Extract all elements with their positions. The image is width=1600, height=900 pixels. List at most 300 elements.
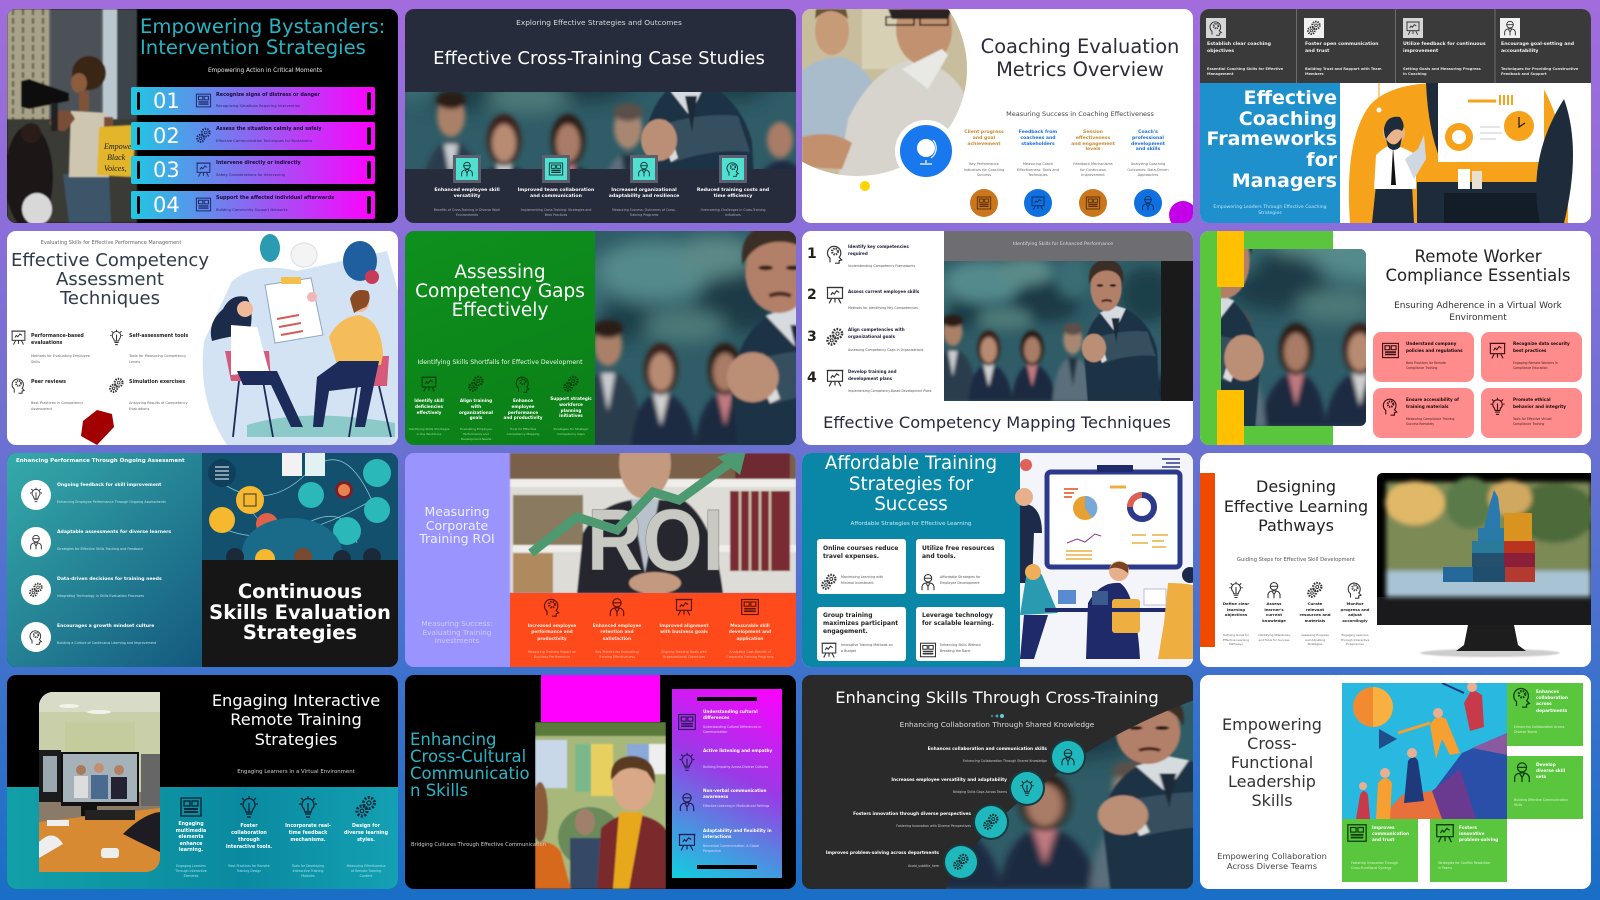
item 3 note: Best Practices in Competency xyxy=(31,401,83,405)
heading xyxy=(212,691,380,749)
roi 4 note: Corporate Training Programs xyxy=(726,655,774,659)
item 1 title: Enhances collaboration and communication skills xyxy=(928,747,1047,752)
slide: Skills Through Cross-Training xyxy=(802,675,1193,889)
roi 3 title: with business goals xyxy=(660,630,708,635)
step 4 title xyxy=(1341,601,1369,623)
box: diverse skills xyxy=(1507,756,1583,819)
item 3 badge xyxy=(975,806,1007,838)
item 4 title: Adaptability and flexibility in xyxy=(703,828,772,833)
card: free resources xyxy=(916,539,1005,594)
step 3 title xyxy=(848,326,905,340)
subtitle: Strategies xyxy=(1258,211,1282,216)
item 3 title: adaptability and resilience xyxy=(609,194,679,199)
column 2 note xyxy=(1305,67,1382,76)
photo: protester with megaphone: Empower xyxy=(103,142,136,151)
title: communication xyxy=(1372,832,1409,837)
method 2 title: through xyxy=(238,838,260,843)
item 1 note: Skills xyxy=(31,360,40,364)
step 3 title: materials xyxy=(1305,618,1325,623)
gap 3 note xyxy=(507,427,539,437)
heading: Coaching Evaluation xyxy=(981,35,1179,58)
step 2 title: Assess xyxy=(1267,601,1281,606)
title xyxy=(1406,397,1459,410)
title: Develop xyxy=(1536,763,1556,768)
heading: Coaching xyxy=(1239,108,1337,130)
metric 4 title: professional xyxy=(1132,136,1164,141)
step 4 note: Experiences xyxy=(1346,642,1364,646)
step 1 title: learning xyxy=(1227,607,1245,612)
icon xyxy=(1511,761,1533,783)
step 4 note: Through Interactive xyxy=(1341,638,1369,642)
yellow accent bottom xyxy=(1217,390,1244,445)
method 4 note: Measuring Effectiveness xyxy=(347,864,385,868)
method 2 title: Foster xyxy=(240,824,258,829)
heading: Strategies for xyxy=(849,474,973,494)
icon xyxy=(820,641,838,659)
item 4 note: Initiatives xyxy=(725,213,741,217)
text: maximizes participant xyxy=(823,620,898,627)
note: Compliance Training xyxy=(1513,422,1544,426)
title: Ensure accessibility of xyxy=(1406,397,1459,402)
item 4 badge xyxy=(945,846,977,878)
gap 4 title: planning xyxy=(561,408,581,413)
gap 4 note: Strategies for Strategic xyxy=(554,427,588,431)
subtitle: Identifying Skills Shortfalls for Effective Development xyxy=(417,359,583,366)
column 2 title: and trust xyxy=(1305,48,1329,54)
method 4 title xyxy=(344,823,388,844)
note xyxy=(940,575,980,587)
step 3 title: organizational goals xyxy=(848,334,895,339)
subtitle xyxy=(1394,301,1562,324)
step 1 title: Identify key competencies xyxy=(848,244,909,249)
gap 3 title: employee xyxy=(512,404,534,409)
heading: for xyxy=(1306,149,1337,171)
item 2 icon xyxy=(21,527,51,557)
roi 1 title: Increased employee xyxy=(528,624,576,629)
item 1 text: Performance-based xyxy=(31,334,84,339)
metric 3 note: Feedback Mechanisms xyxy=(1073,162,1113,166)
item 4 title: time efficiency xyxy=(714,194,752,199)
icon tile 1 xyxy=(453,155,481,183)
column 2 title: Foster open communication xyxy=(1305,42,1379,47)
pill right xyxy=(367,161,371,179)
yellow accent top xyxy=(1217,231,1244,287)
item 3 title: Increased organizational xyxy=(611,188,677,193)
heading: Remote Worker xyxy=(1414,247,1542,266)
heading xyxy=(415,263,585,320)
slide: Cross-Training Case Studies xyxy=(405,9,796,223)
top bar xyxy=(697,697,757,701)
text: engagement. xyxy=(823,628,868,635)
main heading: Strategies xyxy=(243,621,357,644)
step 2 title: learner's xyxy=(1264,607,1284,612)
item 2 text: Self-assessment tools xyxy=(129,334,188,339)
photo: protester with megaphone: Voices, xyxy=(104,164,126,173)
heading: Assessing xyxy=(454,262,546,283)
heading: Compliance Essentials xyxy=(1386,266,1570,285)
roi 4 title xyxy=(729,624,771,643)
metric 1 note: Key Performance xyxy=(969,162,999,166)
item 3 title: Data-driven decisions for training needs xyxy=(57,577,162,582)
column 3 note: in Coaching xyxy=(1403,72,1427,76)
method 4 title: Design for xyxy=(352,824,380,829)
metric 4 title xyxy=(1131,130,1165,152)
heading: Intervention Strategies xyxy=(140,36,366,58)
note: Breaking the Bank xyxy=(940,649,970,653)
column 4 note: Techniques for Providing Constructive xyxy=(1501,67,1578,71)
step 2 icon xyxy=(825,285,845,305)
heading: Skills xyxy=(1251,791,1293,810)
item 2 title: Adaptable assessments for diverse learners xyxy=(57,530,171,535)
subtitle: Ensuring Adherence in a Virtual Work xyxy=(1394,301,1562,311)
roi 2 note: Key Metrics for Evaluating xyxy=(595,650,639,654)
heading xyxy=(1206,87,1337,192)
item 2 note: Implementing Cross-Training: Strategies and xyxy=(521,208,591,212)
heading: Corporate xyxy=(426,518,488,532)
title: Recognize data security xyxy=(1513,341,1570,346)
metric 1 title xyxy=(964,130,1004,147)
note: Minimal Investment xyxy=(841,581,874,585)
heading: Effective Competency xyxy=(11,250,209,271)
step 4 title: development plans xyxy=(848,376,892,381)
gap 2 title: Align training xyxy=(460,398,492,403)
slide: Coaching Evaluation Metrics xyxy=(802,9,1193,223)
card: ethics xyxy=(1481,388,1582,438)
item 2 title: Active listening and empathy xyxy=(703,748,772,753)
divider lines xyxy=(1296,9,1496,83)
column 4 title xyxy=(1501,42,1574,54)
method 1 note xyxy=(175,864,207,880)
header band xyxy=(944,231,1193,261)
method 2 title xyxy=(226,823,272,851)
heading: Pathways xyxy=(1258,516,1334,535)
method 4 note: Content xyxy=(360,874,372,878)
method 4 title: diverse learning xyxy=(344,831,388,836)
gap 3 title xyxy=(504,398,542,421)
slide: Empowering Bystanders xyxy=(7,9,398,223)
step title: Assess the situation calmly and safely xyxy=(216,126,322,132)
side panel xyxy=(672,689,782,878)
item 4 icon xyxy=(21,622,51,652)
step 3 title: resources and xyxy=(1299,612,1331,617)
roi 3 note xyxy=(661,650,707,660)
step note: Effective Communication Techniques for Bystanders xyxy=(216,139,312,143)
step 1 note: Effective Learning xyxy=(1223,638,1249,642)
subtitle: Measuring Success: xyxy=(421,619,493,628)
roi 1 icon xyxy=(542,597,562,617)
gap 4 icon xyxy=(562,375,580,393)
metric 2 note: Effectiveness: Tools and xyxy=(1017,168,1059,172)
gap 2 title: organizational xyxy=(459,410,493,415)
column 4 title: accountability xyxy=(1501,48,1538,54)
item 3 note xyxy=(612,208,676,217)
roi 2 title xyxy=(593,624,641,643)
roi 3 title xyxy=(660,624,708,637)
step 2 title: knowledge xyxy=(1262,618,1286,623)
note: Employee Development xyxy=(940,581,980,585)
roi 1 note: Business Performance xyxy=(534,655,570,659)
step 1 title: Define clear xyxy=(1223,601,1249,606)
text: Utilize free resources xyxy=(922,545,995,552)
item 4 title: Encourages a growth mindset culture xyxy=(57,624,154,629)
note: Engaging Remote Workers in xyxy=(1513,361,1558,365)
note xyxy=(1514,725,1564,736)
metric 4 note: Outcomes: Data-Driven xyxy=(1127,168,1169,172)
icon xyxy=(919,573,937,591)
title xyxy=(1372,826,1409,845)
subtitle: Empowering Leaders Through Effective Coaching xyxy=(1213,205,1327,210)
heading: Metrics Overview xyxy=(996,58,1164,81)
roi 1 note: Measuring Training Impact on xyxy=(528,650,576,654)
step 4 title: accordingly xyxy=(1342,618,1368,623)
gap 1 note: Identifying Skills Shortages xyxy=(409,427,449,431)
heading: Techniques xyxy=(60,288,160,309)
note xyxy=(1406,361,1446,372)
slide: Corporate Training ROI xyxy=(405,453,796,667)
slide: Affordable Training Strategies xyxy=(802,453,1193,667)
metric 1 note: Indicators for Coaching xyxy=(964,168,1004,172)
method 1 note: Through Interactive xyxy=(175,869,207,873)
item 1 note: Enhancing Employee Performance Through Ongoing Assessments xyxy=(57,500,166,504)
note: in Teams xyxy=(1438,866,1452,870)
method 2 title: interactive tools. xyxy=(226,845,272,850)
heading: Enhancing Skills Through Cross-Training xyxy=(835,688,1159,707)
step 2 note: Identifying Milestones xyxy=(1258,633,1290,637)
heading: Cross-Cultural xyxy=(410,747,526,766)
pill left xyxy=(137,127,140,145)
item 4 icon xyxy=(108,377,125,394)
heading: n Skills xyxy=(410,781,468,800)
text: Online courses reduce xyxy=(823,545,898,552)
method 4 icon xyxy=(354,795,378,819)
step title: Intervene directly or indirectly xyxy=(216,160,301,166)
method 1 title: Engaging xyxy=(178,822,204,827)
gap 3 note: Competency Mapping xyxy=(507,432,539,436)
roi 2 title: satisfaction xyxy=(603,637,631,642)
subtitle: Enhancing Collaboration Through Shared Knowledge xyxy=(900,720,1094,729)
item 1 title: Ongoing feedback for skill improvement xyxy=(57,483,161,488)
item 1 icon xyxy=(21,480,51,510)
heading: Leadership xyxy=(1228,772,1316,791)
heading xyxy=(140,15,385,58)
title: problem-solving xyxy=(1459,838,1498,843)
item 3 icon xyxy=(21,575,51,605)
column 3 note xyxy=(1403,67,1481,76)
icon xyxy=(196,128,211,143)
title: across xyxy=(1536,702,1552,707)
metric 2 title: Feedback from xyxy=(1019,130,1057,135)
icon xyxy=(1381,397,1400,416)
slide: Cross-Functional Leadership xyxy=(1200,675,1591,889)
box: communication xyxy=(1342,819,1418,882)
step note: Recognizing Situations Requiring Intervention xyxy=(216,104,300,108)
heading: Measuring xyxy=(424,504,490,519)
metric 2 note: Measuring Coach xyxy=(1023,162,1053,166)
heading: Remote Training xyxy=(230,710,362,729)
method 1 icon xyxy=(179,795,203,819)
heading: Empowering Bystanders: xyxy=(140,15,385,38)
step 4 note xyxy=(1341,633,1369,647)
heading: Strategies xyxy=(255,730,337,749)
heading: Engaging Interactive xyxy=(212,691,380,710)
title: sets xyxy=(1536,775,1546,780)
slide: Continuous Skills Evaluation xyxy=(7,453,398,667)
pill left xyxy=(137,196,140,214)
item 1 title xyxy=(703,709,758,721)
metric 3 title: Session xyxy=(1083,130,1103,135)
item 1 note xyxy=(31,354,90,365)
icon tile 1 xyxy=(1206,18,1226,38)
item 4 note: Evaluations xyxy=(129,406,149,410)
method 1 title xyxy=(176,822,206,854)
step 2 number: 2 xyxy=(807,287,817,303)
step 2 icon xyxy=(1265,581,1283,599)
icon tile 4 xyxy=(1500,18,1520,38)
step 1 title: required xyxy=(848,251,868,256)
slide: Competency Assessment Techniques xyxy=(7,231,398,445)
item 3 note: Fostering Innovation with Diverse Perspectives xyxy=(896,824,971,828)
method 4 note: of Remote Training xyxy=(351,869,381,873)
gap 4 title xyxy=(550,396,592,419)
method 1 title: multimedia xyxy=(176,828,206,834)
roi 4 title: application xyxy=(736,637,763,642)
metric 3 icon xyxy=(1079,189,1107,217)
note: Enhancing Collaboration Across xyxy=(1514,725,1564,729)
note: Innovative Training Methods on xyxy=(841,643,893,647)
step 4 title: progress and xyxy=(1341,607,1369,612)
note: Skills xyxy=(1514,803,1522,807)
subtitle: Engaging Learners in a Virtual Environment xyxy=(237,769,355,775)
roi 3 icon xyxy=(674,597,694,617)
item 1 text xyxy=(31,333,84,346)
item 3 icon xyxy=(677,792,697,812)
text xyxy=(922,612,994,628)
illustration: team climbing a mountain xyxy=(1342,683,1507,819)
metric 2 title xyxy=(1019,130,1057,147)
note xyxy=(1406,417,1454,428)
item 1 title: Understanding cultural xyxy=(703,709,758,714)
gap 1 title: effectively xyxy=(417,410,441,415)
photo: man pointing behind curved dark panel xyxy=(802,675,1193,889)
item 1 title: differences xyxy=(703,715,729,720)
heading: Effectively xyxy=(452,300,548,321)
column 3 note: Setting Goals and Measuring Progress xyxy=(1403,67,1481,71)
step 1 note xyxy=(1223,633,1249,647)
heading xyxy=(410,731,530,799)
photo: protester with megaphone xyxy=(7,9,138,223)
roi 2 icon xyxy=(607,597,627,617)
method 3 note: Interactive Training xyxy=(293,869,323,873)
heading: Effective Learning xyxy=(1224,496,1368,516)
icon xyxy=(1434,822,1456,844)
item 4 note xyxy=(700,208,766,217)
metric 4 title: development xyxy=(1131,142,1165,147)
teal panel xyxy=(802,453,1020,667)
method 2 note: Best Practices for Remote xyxy=(228,864,270,868)
item 4 note: Analyzing Results of Competency xyxy=(129,401,188,405)
item 2 note: Tools for Measuring Competency xyxy=(129,354,186,358)
gap 2 icon xyxy=(467,375,485,393)
gap 1 title: Identify skill xyxy=(414,398,444,403)
note xyxy=(1351,861,1398,872)
icon xyxy=(196,162,211,177)
photo: man pointing, mirrored xyxy=(1221,249,1366,426)
photo: young man in festival clothing xyxy=(535,722,666,889)
step 01 bar xyxy=(131,87,375,115)
item 2 note: Strategies for Effective Skills Tracking and Feedback xyxy=(57,547,143,551)
dark margin beside photo xyxy=(1161,261,1193,401)
item 3 icon xyxy=(10,377,27,394)
note: Compliance Education xyxy=(1513,366,1548,370)
item 2 note xyxy=(129,354,186,365)
item 4 note: Overcoming Challenges in Cross-Training xyxy=(700,208,766,212)
metric 4 note: Approaches xyxy=(1138,173,1158,177)
title xyxy=(1406,341,1463,354)
item 4 note: Perspective xyxy=(703,849,721,853)
step 4 title xyxy=(848,368,897,382)
slide: Assessing Competency Gaps xyxy=(405,231,796,445)
metric 2 note: Techniques xyxy=(1028,173,1048,177)
heading: Enhancing xyxy=(410,730,496,749)
item 4 note xyxy=(703,844,759,854)
metric 3 note: for Continuous xyxy=(1080,168,1106,172)
number: 03 xyxy=(153,158,180,182)
heading: Cross- xyxy=(1247,734,1297,753)
item 4 title: interactions xyxy=(703,834,731,839)
icon xyxy=(1488,397,1507,416)
box: collaboration xyxy=(1507,683,1583,746)
step 1 icon xyxy=(825,244,845,264)
gap 3 note: Tools for Effective xyxy=(510,427,536,431)
icon tile 4 xyxy=(719,155,747,183)
column 1 note xyxy=(1207,67,1283,76)
icon xyxy=(196,94,212,108)
metric 3 title: effectiveness xyxy=(1076,136,1110,141)
gap 4 note: Competency Gaps xyxy=(557,432,585,436)
subtitle: Guiding Steps for Effective Skill Development xyxy=(1237,557,1355,563)
heading xyxy=(419,505,495,546)
icon: globe xyxy=(917,139,937,165)
metric 1 title: achievement xyxy=(967,142,1001,147)
heading: Competency Gaps xyxy=(415,281,585,302)
photo: man pointing in front of colleagues xyxy=(595,231,796,445)
item 1 title: Enhanced employee skill xyxy=(434,188,500,193)
metric 3 note: Improvement xyxy=(1081,173,1105,177)
subtitle: Empowering Action in Critical Moments xyxy=(208,68,322,74)
title: Understand company xyxy=(1406,341,1456,346)
item 3 title: Fosters innovation through diverse perspectives xyxy=(853,812,971,817)
metric 1 note: Success xyxy=(977,173,991,177)
step note: Building Community Support Networks xyxy=(216,208,288,212)
step 4 number: 4 xyxy=(807,370,817,386)
step 3 note xyxy=(1301,633,1329,647)
item 4 title xyxy=(697,188,769,199)
kicker: Evaluating Skills for Effective Performance Management xyxy=(41,240,181,246)
step 03 bar xyxy=(131,156,375,184)
column 2 note: Building Trust and Rapport with Team xyxy=(1305,67,1381,71)
subtitle xyxy=(1213,204,1327,216)
title xyxy=(1513,341,1570,354)
gap 2 title: goals xyxy=(470,415,482,420)
column 2 note: Members xyxy=(1305,72,1324,76)
orange accent bar xyxy=(1200,473,1215,647)
pager dots xyxy=(990,713,1006,719)
step 3 title xyxy=(1299,601,1331,623)
column 4 note xyxy=(1501,67,1578,76)
step 2 note: Methods for Identifying Key Competencies xyxy=(848,306,918,310)
illustration: two people reviewing a clipboard, plus red hexagon xyxy=(7,231,398,445)
gap 4 title: initiatives xyxy=(559,413,583,418)
